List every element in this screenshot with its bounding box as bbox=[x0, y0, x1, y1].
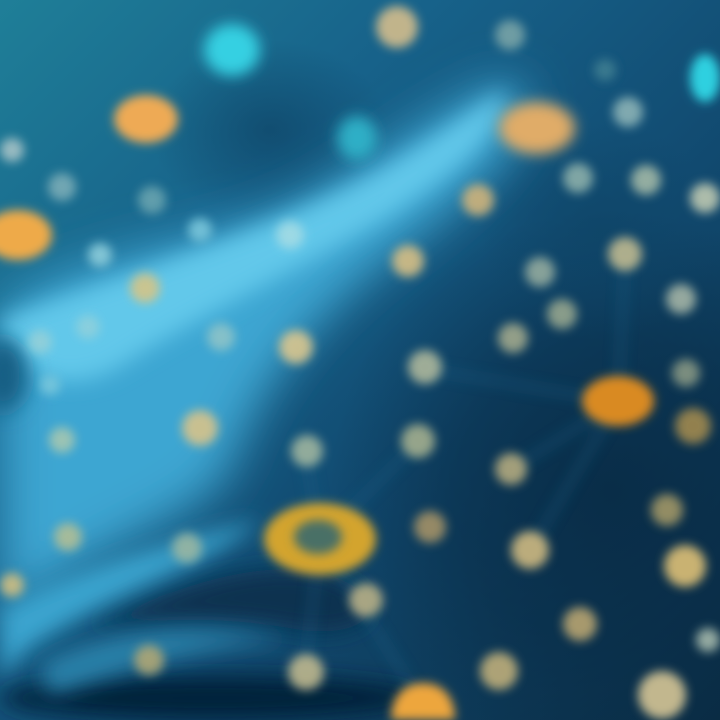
cyan glowing nodes bbox=[204, 24, 720, 160]
right orange node bbox=[582, 376, 654, 426]
top right orange node bbox=[499, 102, 575, 154]
left orange node bbox=[0, 210, 52, 260]
light blue diagonal band bbox=[0, 80, 526, 695]
eye-shaped central node bbox=[264, 503, 376, 575]
large orange node bbox=[114, 95, 178, 143]
network links bbox=[305, 255, 625, 700]
bottom orange node bbox=[391, 683, 455, 720]
